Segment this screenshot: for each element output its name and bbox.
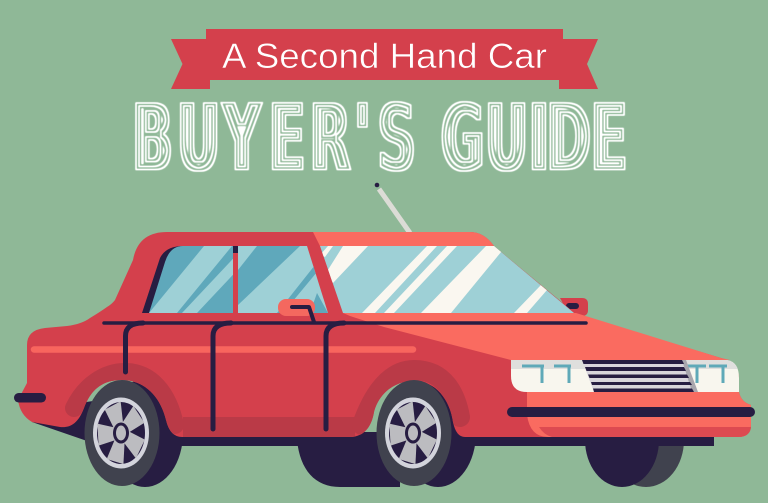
- headlights: [511, 360, 739, 392]
- beltline: [104, 321, 586, 325]
- door seams: [126, 323, 344, 429]
- rear wheel: [84, 380, 160, 486]
- far rear wheel shadow: [297, 440, 400, 487]
- side mirror: [278, 299, 315, 322]
- rear bumper: [14, 393, 46, 402]
- banner text: A Second Hand Car: [222, 37, 547, 76]
- heading: buyer's guide: BUYER'S GUIDE: [133, 84, 627, 192]
- hood: [343, 313, 730, 360]
- underbody: [32, 400, 714, 446]
- body shading: [74, 370, 460, 437]
- far side mirror: [560, 298, 588, 316]
- far front wheel: [585, 393, 684, 487]
- title banner: [171, 29, 598, 89]
- side trim stripe: [34, 346, 413, 353]
- coral roof strip: [313, 232, 494, 246]
- car body: [18, 232, 751, 437]
- front bumper: [507, 392, 755, 437]
- door pillar tab: [233, 246, 239, 253]
- car illustration: [14, 183, 755, 487]
- near wheel shadows: [107, 379, 476, 487]
- front door window: [238, 246, 328, 313]
- grille: [582, 360, 698, 392]
- rear door window: [142, 246, 233, 313]
- antenna: [375, 183, 410, 233]
- windshield: [320, 246, 574, 313]
- front wheel: [376, 380, 452, 486]
